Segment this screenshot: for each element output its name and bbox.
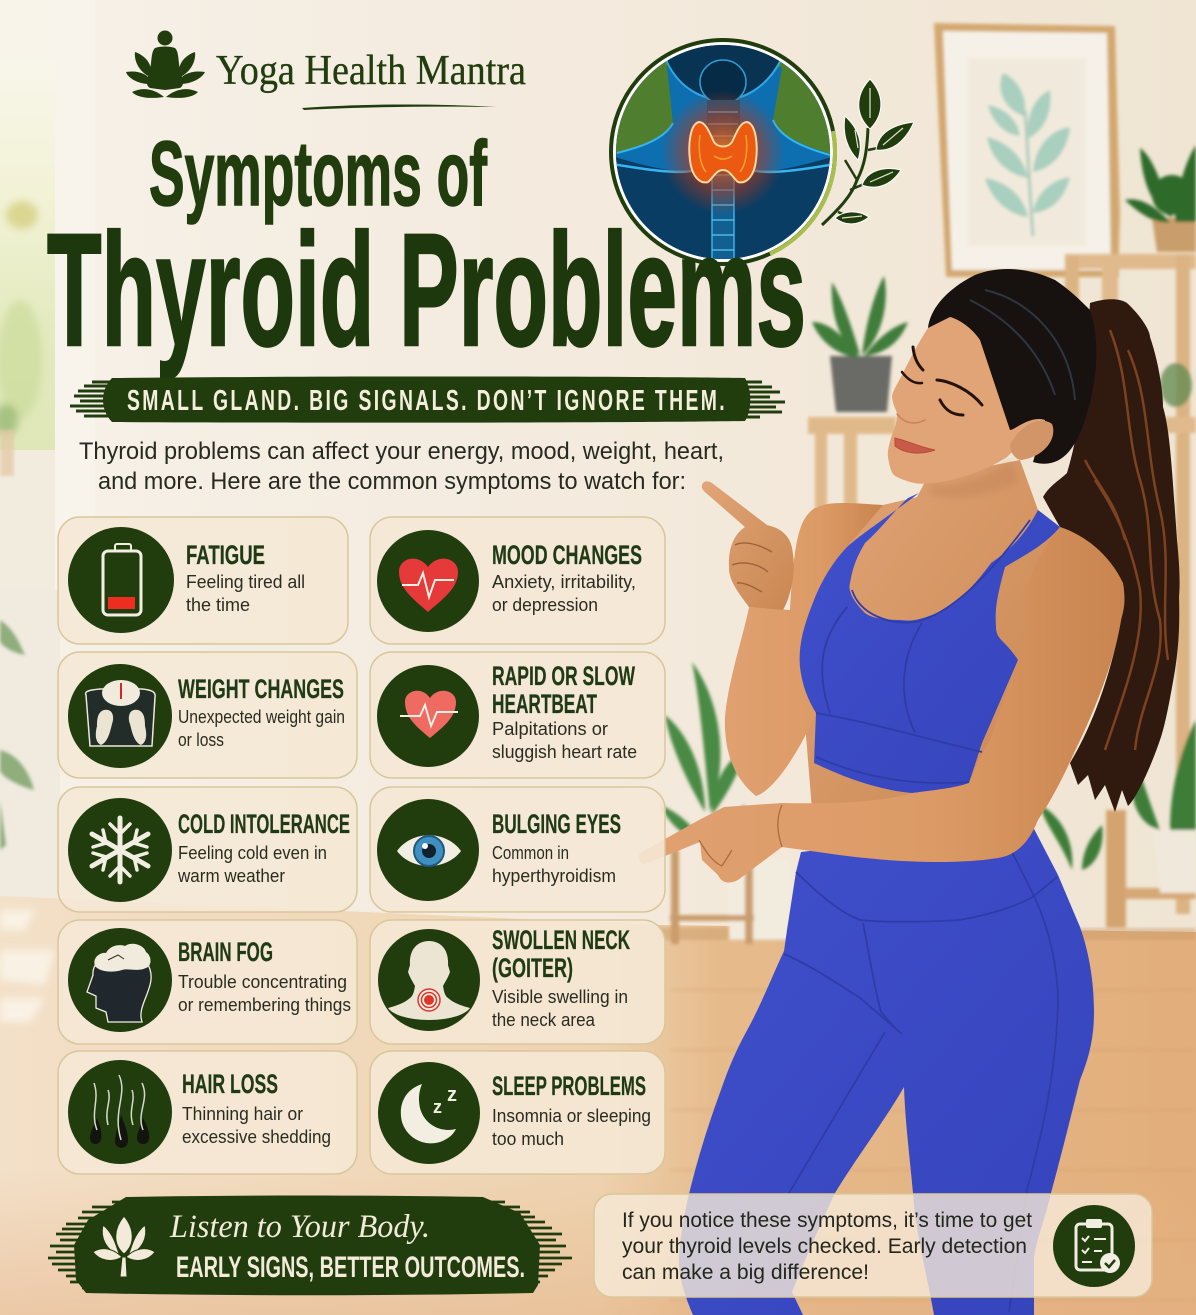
callout text: If you notice these symptoms, it’s time to get [622,1208,1032,1232]
card: heartbeat [370,652,665,778]
intro text: Thyroid problems can affect your energy, mood, weight, heart, [79,438,724,465]
callout text: your thyroid levels checked. Early detection [622,1234,1027,1258]
ear [1010,421,1053,460]
script line: Listen to Your Body. [169,1209,430,1245]
description: Insomnia or sleeping [492,1105,651,1126]
description: Anxiety, irritability, [492,571,636,592]
hair [928,269,1096,464]
heading: (GOITER) [492,953,573,983]
description [492,1105,651,1149]
shelves and plants [660,145,1196,944]
description: Feeling tired all [186,571,305,592]
leaf branch [822,79,914,225]
thyroid neck medallion [608,40,840,270]
description: warm weather [177,865,285,886]
description: the time [186,594,250,615]
symptom cards right column [370,517,665,1174]
description [492,986,628,1030]
upper arm and forearm, viewer left [725,503,883,796]
callout box [594,1194,1152,1297]
description: excessive shedding [182,1126,331,1147]
description: Common in [492,842,569,863]
card: hair loss [58,1051,357,1174]
title line 1: Symptoms of [149,123,487,225]
heading: BRAIN FOG [178,937,273,967]
ponytail [1043,299,1180,812]
description [186,571,305,615]
icon: meditating figure in lotus [126,30,205,98]
tagline brush banner [70,376,785,423]
description: or depression [492,594,598,615]
heading [492,925,630,983]
torso and neck [800,460,1060,815]
callout text [622,1208,1032,1284]
heading: SWOLLEN NECK [492,925,630,955]
heading [492,661,635,719]
card: weight changes [58,652,357,778]
icon: falling hair [90,1075,149,1148]
description: too much [492,1128,564,1149]
description: Palpitations or [492,718,608,739]
icon: bathroom scale [86,680,155,746]
symptom cards left column [58,517,357,1174]
icon: low battery [103,544,141,615]
pointing hand, upper [702,481,794,610]
description: Trouble concentrating [178,971,347,992]
description [492,718,637,762]
logo [126,30,526,110]
intro text: and more. Here are the common symptoms to watch for: [98,468,686,495]
card: brain fog [58,920,357,1044]
neck shadow [930,460,1020,497]
card: cold intolerance [58,787,357,912]
thyroid gland [689,122,757,182]
description: or remembering things [178,994,351,1015]
heading: SLEEP PROBLEMS [492,1071,646,1101]
icon: heart with ecg [400,691,458,738]
icon: neck with target [388,941,470,1020]
icon: eye [397,835,461,866]
description [182,1103,331,1147]
icon: moon and zzz [401,1084,457,1143]
icon: moon and zzz: z [433,1097,442,1117]
intro text [79,438,724,495]
description [492,571,636,615]
card: mood changes [370,517,665,644]
icon: clipboard check [1053,1205,1135,1287]
facial features [895,347,982,453]
heading: RAPID OR SLOW [492,661,635,691]
brand name: Yoga Health Mantra [216,48,526,94]
card: fatigue [58,517,348,644]
woman in blue activewear [639,269,1180,1315]
framed leaf picture [934,23,1120,277]
icon: lotus [93,1216,155,1277]
card: swollen neck [370,920,665,1044]
description [492,842,616,886]
heading: BULGING EYES [492,809,621,839]
heading: MOOD CHANGES [492,540,642,570]
heading: HAIR LOSS [182,1069,278,1099]
heading: HEARTBEAT [492,689,597,719]
heading: FATIGUE [186,540,265,570]
pointing arm and hand, lower [639,527,1124,883]
description: Thinning hair or [182,1103,303,1124]
description: sluggish heart rate [492,741,637,762]
card: sleep problems [370,1051,665,1174]
tagline brush banner: SMALL GLAND. BIG SIGNALS. DON’T IGNORE THEM. [127,385,727,417]
description [178,706,345,750]
face [888,310,1045,484]
bold line: EARLY SIGNS, BETTER OUTCOMES. [176,1251,525,1284]
heading: WEIGHT CHANGES [178,674,344,704]
description: Feeling cold even in [178,842,327,863]
heading: COLD INTOLERANCE [178,809,350,839]
icon: moon and zzz: z [447,1084,457,1106]
callout text: can make a big difference! [622,1260,869,1284]
icon: head with cloudy brain [87,944,151,1022]
card: bulging eyes [370,787,665,912]
description: hyperthyroidism [492,865,616,886]
description [177,842,327,886]
sports bra [800,493,1060,793]
icon: snowflake [92,818,148,882]
description: Visible swelling in [492,986,628,1007]
description [178,971,351,1015]
icon: heart with pulse [399,559,458,612]
bottom brush banner [48,1196,572,1295]
leggings [679,825,1094,1315]
description: or loss [178,729,224,750]
description: Unexpected weight gain [178,706,345,727]
description: the neck area [492,1009,596,1030]
